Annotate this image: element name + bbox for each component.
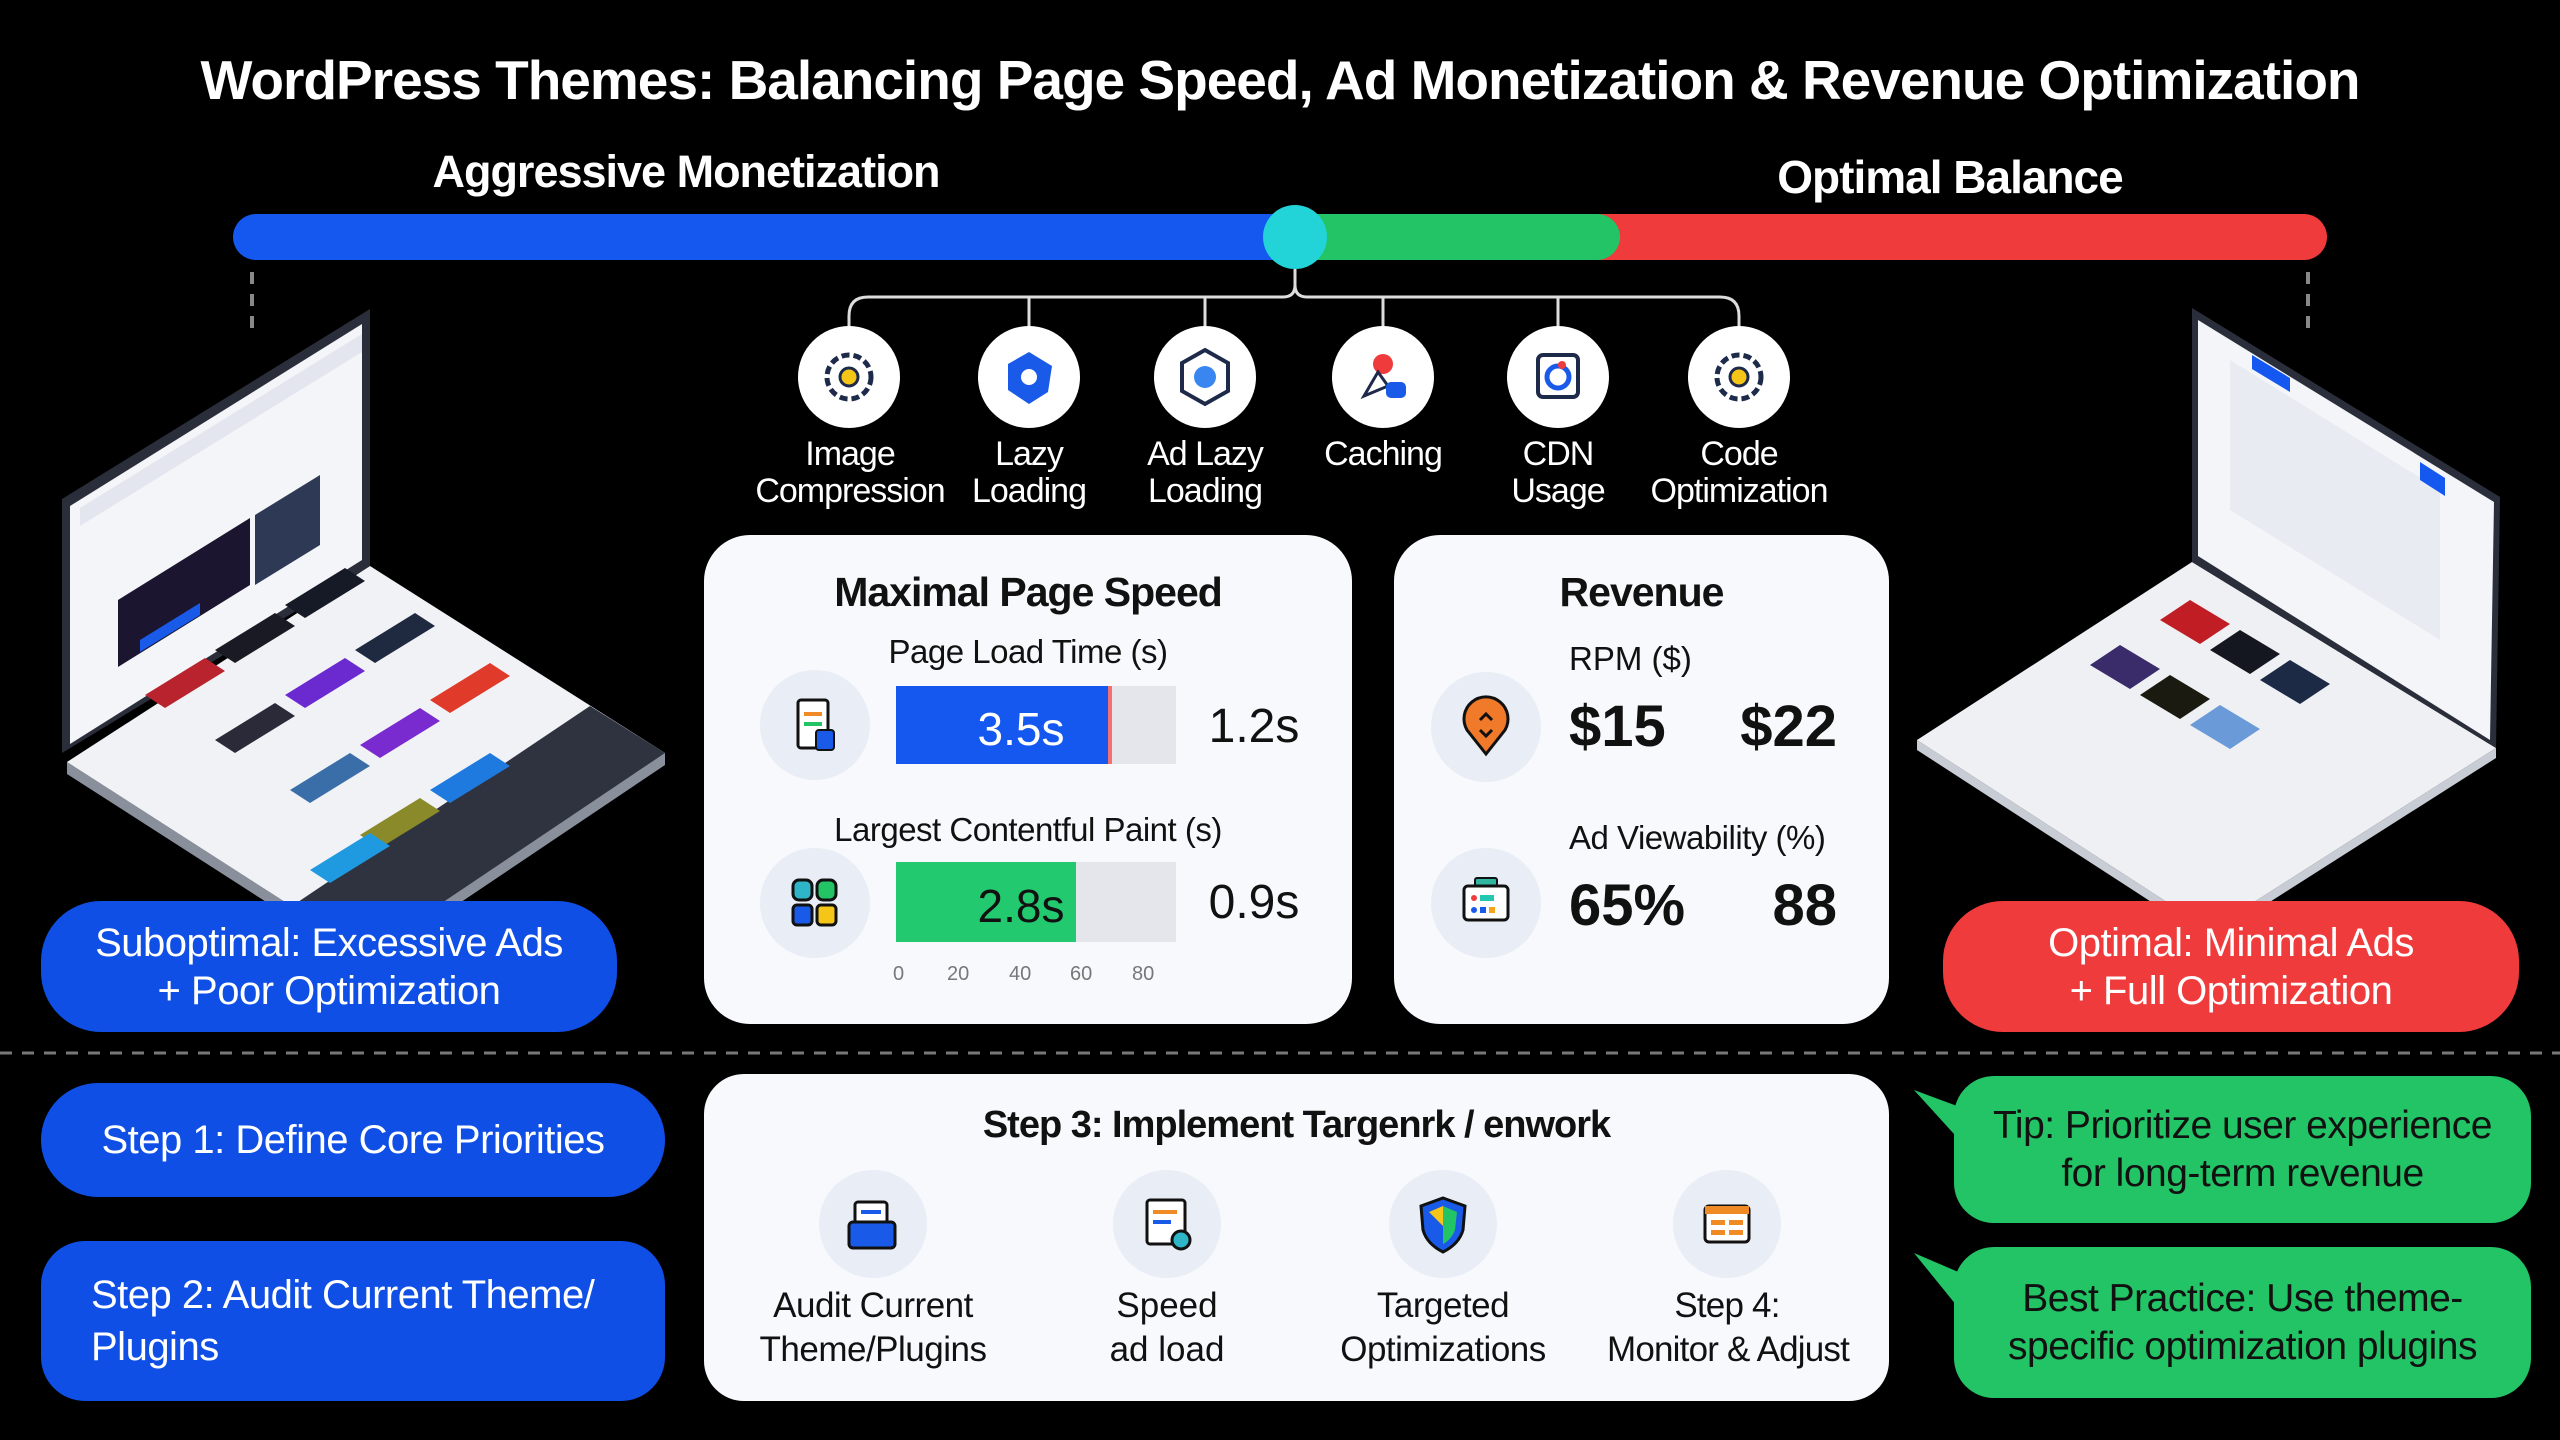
bar: page load time	[896, 686, 1176, 764]
callout: best practice: Best Practice: Use theme-	[2022, 1276, 2463, 1320]
label: code optimization: Code	[1700, 435, 1778, 473]
step item: step 4 monitor: Monitor & Adjust	[1607, 1330, 1849, 1369]
panel: step 3	[704, 1074, 1889, 1401]
laptop: right	[1917, 308, 2500, 940]
label: code optimization	[1651, 435, 1827, 510]
step item: step 4 monitor: Step 4:	[1674, 1286, 1780, 1325]
step item: targeted optimizations	[1340, 1170, 1546, 1369]
panel: revenue: $22	[1740, 694, 1837, 759]
bar: largest contentful paint: 2.8s	[978, 880, 1064, 932]
step 2: Step 2: Audit Current Theme/	[91, 1273, 594, 1317]
icon row: optimization techniques	[755, 326, 1827, 510]
axis labels: 60	[1070, 963, 1092, 985]
label: ad lazy loading	[1147, 435, 1264, 510]
callout: optimal	[1943, 901, 2519, 1032]
label: cdn usage	[1511, 435, 1605, 510]
icon: lazy loading	[978, 326, 1080, 428]
label: lazy loading: Loading	[972, 472, 1086, 510]
step 1: Step 1: Define Core Priorities	[101, 1118, 604, 1162]
label: image compression: Compression	[755, 472, 945, 510]
label: cdn usage: CDN	[1523, 435, 1593, 473]
callout: best practice: specific optimization plugins	[2008, 1324, 2477, 1368]
laptop: left	[62, 309, 665, 966]
step item: speed ad load	[1110, 1170, 1224, 1369]
label: ad viewability: Ad Viewability (%)	[1569, 819, 1825, 856]
icon: grid	[760, 848, 870, 958]
label: image compression: Image	[805, 435, 895, 473]
step item: step 4 monitor	[1607, 1170, 1850, 1369]
icon: dashboard	[1431, 848, 1541, 958]
step 2: Plugins	[91, 1325, 219, 1369]
step item: audit: Audit Current	[773, 1286, 973, 1325]
values: rpm: $15	[1569, 694, 1666, 759]
step item: speed ad load: ad load	[1110, 1330, 1224, 1369]
values: ad viewability: 65%	[1569, 873, 1685, 938]
callout: tip	[1914, 1076, 2531, 1223]
axis labels: 0	[893, 963, 904, 985]
step 1	[41, 1083, 665, 1197]
step item: speed ad load: Speed	[1116, 1286, 1218, 1325]
panel: revenue: 88	[1772, 873, 1837, 938]
callout: optimal: + Full Optimization	[2070, 968, 2392, 1012]
value: 1.2s: 1.2s	[1209, 700, 1299, 753]
connector lines	[849, 269, 1739, 330]
step item: audit: Theme/Plugins	[760, 1330, 986, 1369]
title: WordPress Themes: Balancing Page Speed, Ad Monetization & Revenue Optimization	[200, 49, 2360, 111]
heading: revenue: Revenue	[1560, 569, 1723, 615]
callout: tip: for long-term revenue	[2061, 1152, 2424, 1194]
label: caching: Caching	[1324, 435, 1442, 473]
icon: cdn usage	[1507, 326, 1609, 428]
label: code optimization: Optimization	[1651, 472, 1827, 510]
callout: suboptimal: Suboptimal: Excessive Ads	[95, 920, 563, 964]
axis labels: 20	[947, 963, 969, 985]
callout: optimal: Optimal: Minimal Ads	[2048, 920, 2414, 964]
label: image compression	[755, 435, 945, 510]
icon: caching	[1332, 326, 1434, 428]
icon: location pin	[1431, 672, 1541, 782]
heading: step 3: Step 3: Implement Targenrk / enwork	[983, 1104, 1610, 1146]
axis labels	[893, 963, 1154, 985]
axis labels: 40	[1009, 963, 1031, 985]
label: rpm: RPM ($)	[1569, 640, 1692, 677]
panel: revenue	[1394, 535, 1889, 1024]
label: lazy loading	[972, 435, 1086, 510]
label: ad lazy loading: Ad Lazy	[1147, 435, 1263, 473]
axis labels: 80	[1132, 963, 1154, 985]
callout: suboptimal	[41, 901, 617, 1032]
panel: maximal page speed	[704, 535, 1352, 1024]
icon: ad lazy loading	[1154, 326, 1256, 428]
label: cdn usage: Usage	[1511, 472, 1605, 510]
label: lazy loading: Lazy	[995, 435, 1063, 473]
step item: targeted optimizations: Optimizations	[1340, 1330, 1546, 1369]
label: largest contentful paint: Largest Contentful Paint (s)	[834, 811, 1222, 848]
step item: targeted optimizations: Targeted	[1377, 1286, 1509, 1325]
callout: best practice	[1914, 1247, 2531, 1398]
step item: audit	[760, 1170, 986, 1369]
callout: tip: Tip: Prioritize user experience	[1993, 1104, 2492, 1146]
step 2	[41, 1241, 665, 1401]
value: 0.9s: 0.9s	[1209, 876, 1299, 929]
bar: largest contentful paint	[896, 862, 1176, 942]
icon: code optimization	[1688, 326, 1790, 428]
icon: image compression	[798, 326, 900, 428]
label: ad lazy loading: Loading	[1148, 472, 1262, 510]
heading: optimal balance: Optimal Balance	[1777, 151, 2123, 203]
bar: page load time: 3.5s	[978, 703, 1064, 755]
icon: document	[760, 670, 870, 780]
slider bar	[233, 205, 2327, 269]
heading: maximal page speed: Maximal Page Speed	[834, 569, 1222, 615]
callout: suboptimal: + Poor Optimization	[158, 968, 500, 1012]
label: page load time: Page Load Time (s)	[888, 633, 1167, 670]
heading: aggressive monetization: Aggressive Monetization	[432, 146, 940, 197]
